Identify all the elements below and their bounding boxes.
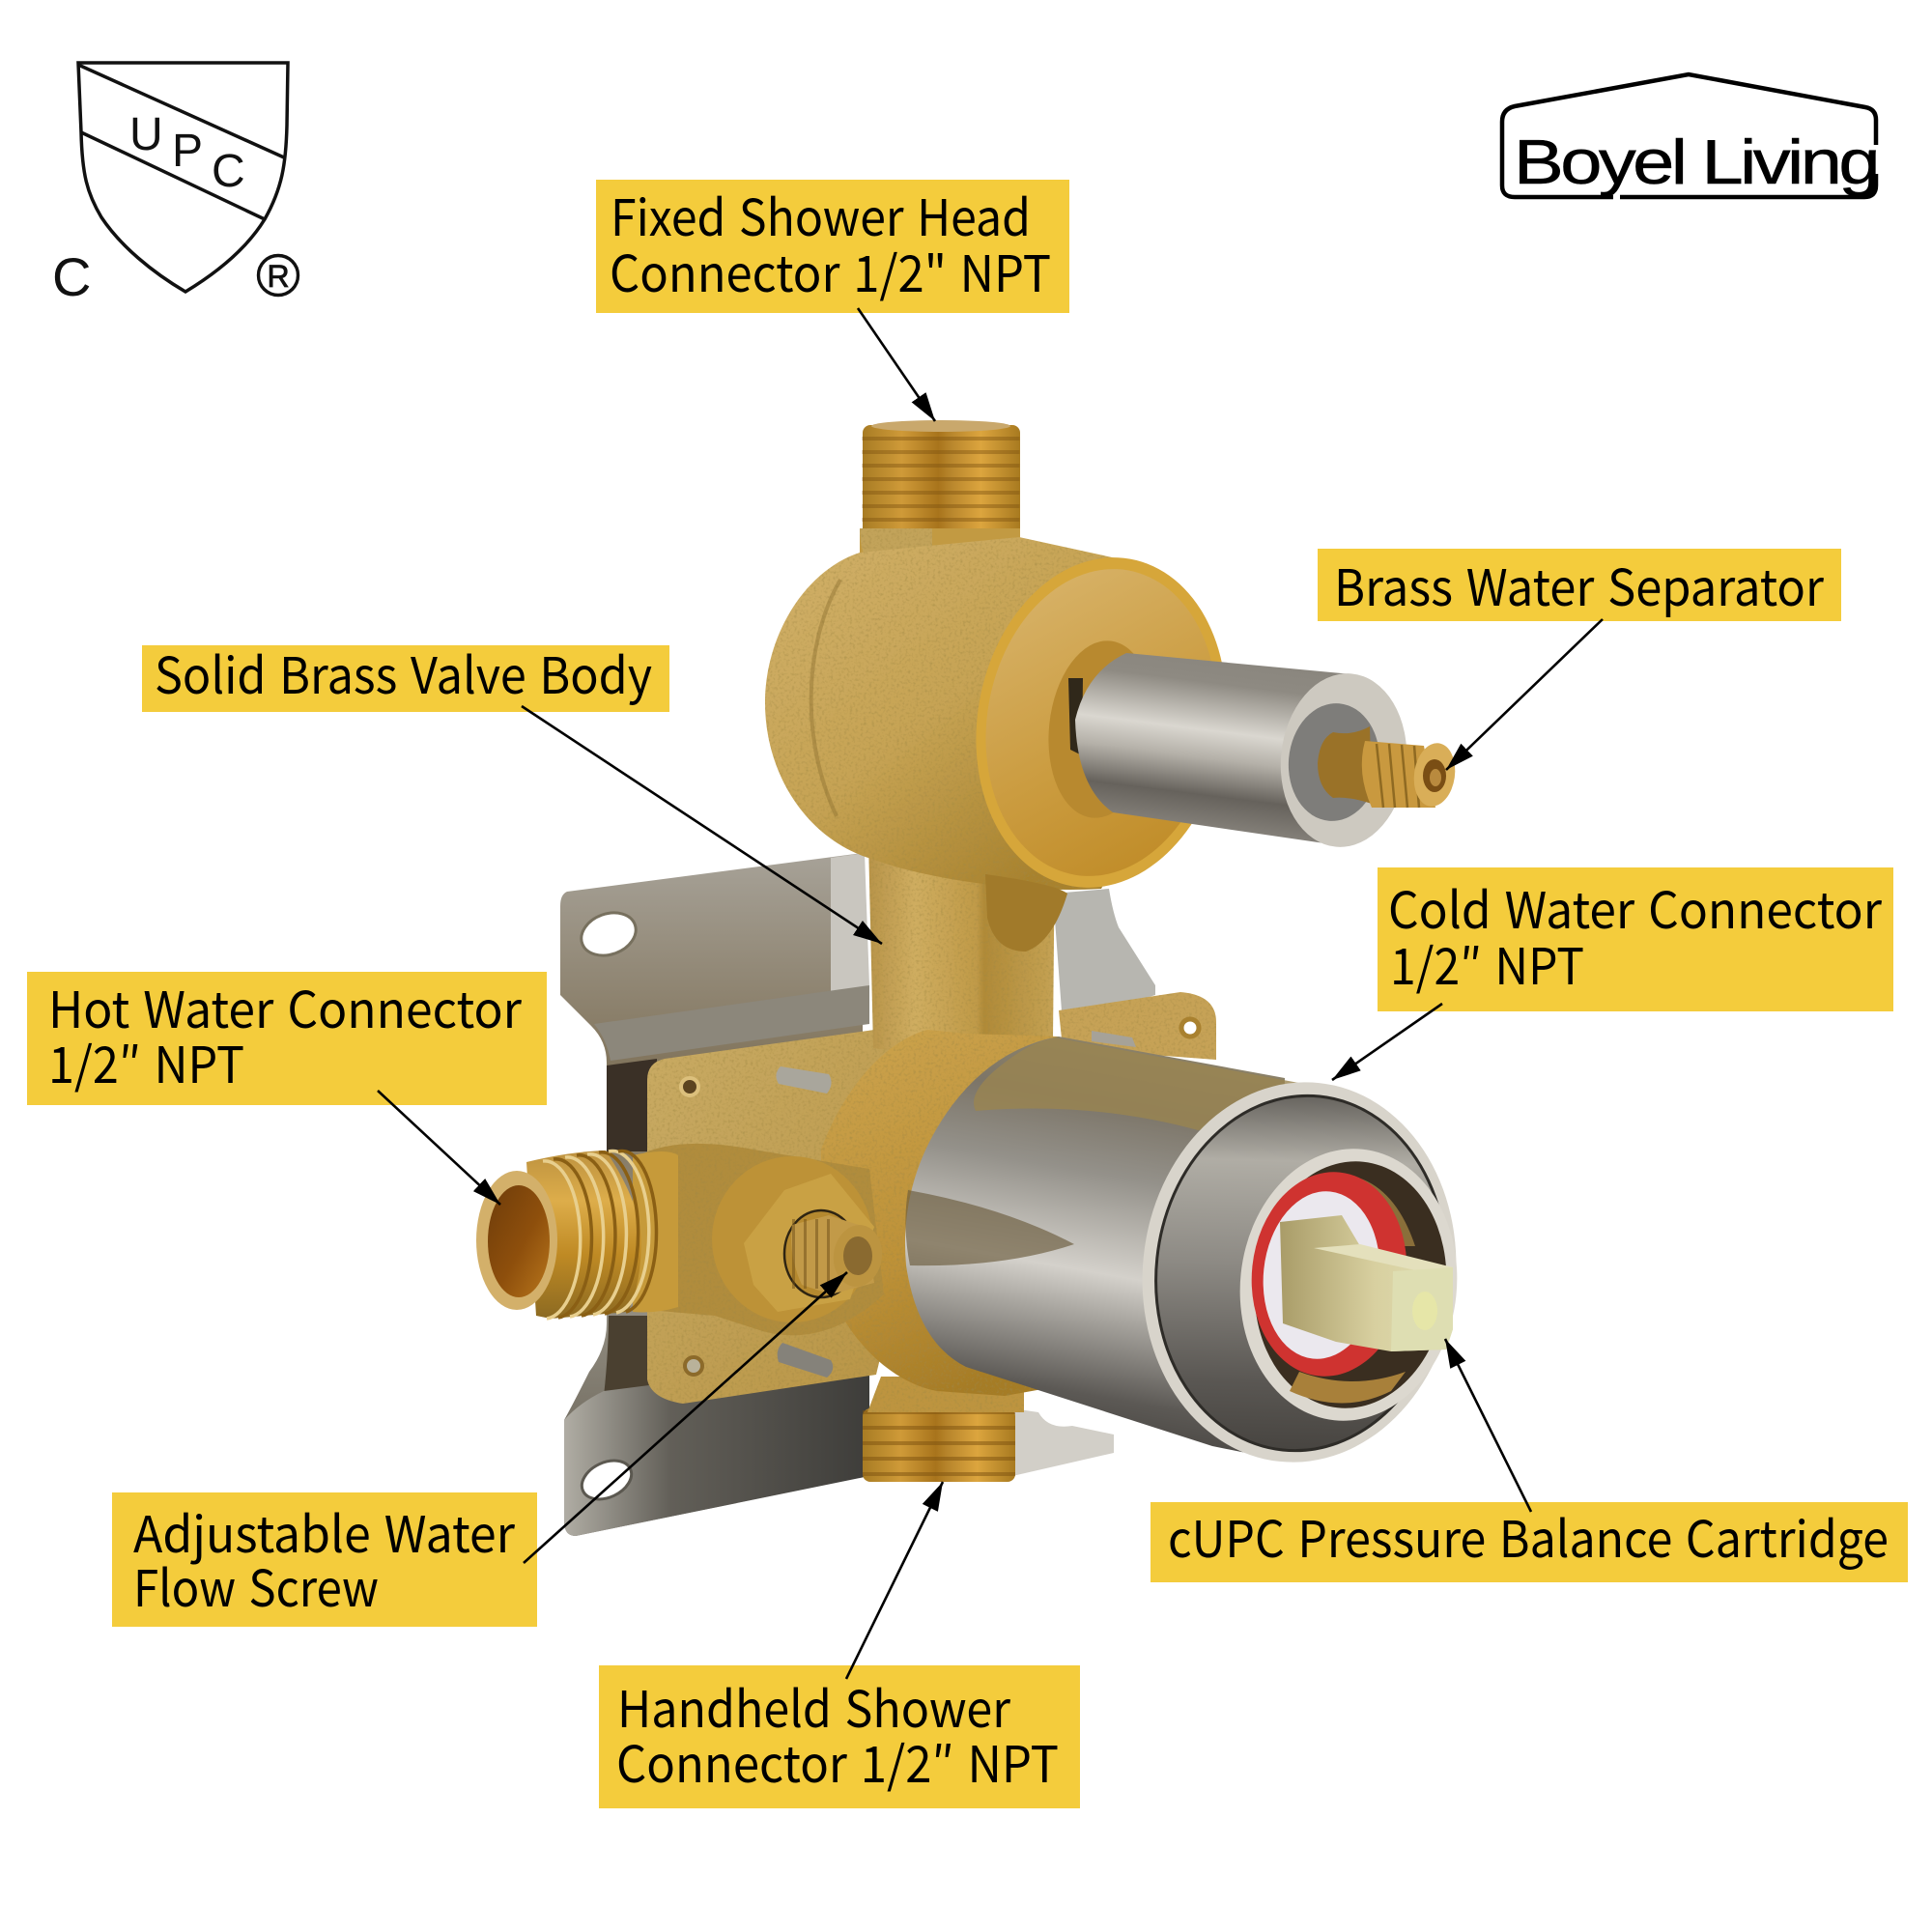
hot water threaded nipple xyxy=(476,1151,656,1319)
arrow: brass water separator xyxy=(1446,619,1603,770)
front ring xyxy=(1123,1066,1475,1478)
stem end inner xyxy=(1284,699,1384,825)
callout: handheld shower connector: Connector 1/2″ NPT xyxy=(616,1724,1059,1797)
callout: brass water separator: Brass Water Separator xyxy=(1334,548,1825,620)
plate bright edge near neck xyxy=(831,853,869,995)
sleeve lower reflection xyxy=(905,1190,1074,1265)
plate fold band xyxy=(594,985,869,1061)
neck xyxy=(868,840,1055,1053)
UPC letters: P xyxy=(172,126,203,177)
sleeve brass reflection xyxy=(974,1037,1304,1130)
house outline xyxy=(1502,74,1876,197)
callout: cUPC pressure balance cartridge: cUPC Pressure Balance Cartridge xyxy=(1168,1499,1889,1572)
arrow: fixed shower head xyxy=(858,308,935,421)
hot water connector body xyxy=(633,1144,886,1335)
arrow: cartridge xyxy=(1445,1339,1531,1512)
shield outline xyxy=(78,63,288,292)
pin upper xyxy=(776,1066,832,1094)
inner cavity xyxy=(1242,1151,1459,1418)
registered mark: R xyxy=(267,259,290,294)
plate screw holes xyxy=(681,1078,698,1095)
arrow: solid brass valve body xyxy=(522,706,882,944)
arrow: adjustable water flow screw xyxy=(524,1272,847,1563)
callout: cold water connector xyxy=(1378,867,1893,1011)
callout: fixed shower head connector xyxy=(596,178,1069,313)
connector neck xyxy=(633,1151,678,1312)
callout: handheld shower connector xyxy=(599,1665,1080,1808)
top connector xyxy=(860,420,1020,565)
neck side lump xyxy=(985,874,1067,952)
brass plate xyxy=(647,1027,927,1404)
inner lip xyxy=(1227,1138,1470,1432)
plate right lower xyxy=(1012,1408,1114,1476)
main valve sleeve xyxy=(905,1037,1285,1459)
callout: cold water connector: Cold Water Connector xyxy=(1388,870,1883,943)
brass spline xyxy=(1318,726,1459,810)
UPC letters: C xyxy=(212,146,245,197)
bottom connector threads xyxy=(863,1377,1024,1482)
dark gap lower xyxy=(604,1316,657,1396)
white core xyxy=(1255,1185,1388,1365)
adjustment screw xyxy=(791,1215,874,1294)
callout: fixed shower head connector: Fixed Shower Head xyxy=(611,178,1031,250)
mounting slot lower xyxy=(576,1453,638,1507)
pin rear xyxy=(1092,1031,1136,1047)
callout: adjustable water flow screw: Flow Screw xyxy=(133,1548,379,1621)
rim xyxy=(476,1171,557,1310)
arrow: hot water connector xyxy=(378,1091,500,1205)
callout: adjustable water flow screw: Adjustable Water xyxy=(133,1494,516,1567)
plate right upper xyxy=(1053,889,1155,1024)
plate lower section xyxy=(564,1357,869,1536)
callout: adjustable water flow screw xyxy=(112,1492,537,1627)
callout: cold water connector: 1/2″ NPT xyxy=(1390,926,1584,999)
front cup xyxy=(1139,1081,1463,1465)
callout: handheld shower connector: Handheld Shower xyxy=(617,1669,1011,1742)
brass liner xyxy=(1290,1372,1406,1403)
cartridge stem xyxy=(1280,1215,1453,1351)
UPC letters: U xyxy=(129,109,163,160)
flange xyxy=(712,1156,872,1322)
callout: solid brass valve body: Solid Brass Valve Body xyxy=(155,636,652,708)
bore xyxy=(488,1185,550,1297)
pin lower xyxy=(778,1343,833,1378)
registered mark xyxy=(259,255,298,296)
brand name: Boyel Living xyxy=(1514,127,1877,197)
dark gap upper xyxy=(607,1059,657,1151)
upper flange xyxy=(951,537,1252,908)
callout: fixed shower head connector: Connector 1/2" NPT xyxy=(610,234,1051,306)
logo: Boyel Living xyxy=(1502,74,1877,197)
UPC letters xyxy=(129,109,245,197)
arrow: cold water connector xyxy=(1332,1004,1442,1080)
thread turns xyxy=(543,1151,656,1319)
product photo: valve xyxy=(476,420,1475,1536)
brass plate right xyxy=(1059,992,1216,1060)
callout: hot water connector: 1/2″ NPT xyxy=(48,1025,244,1097)
o-ring xyxy=(784,1210,858,1297)
C letter: C xyxy=(52,246,91,307)
stem cylinder xyxy=(1075,653,1351,845)
callout: hot water connector: Hot Water Connector xyxy=(48,970,523,1042)
upper body casting xyxy=(765,537,1217,890)
casting seam xyxy=(811,580,840,816)
stem end ring xyxy=(1273,668,1414,852)
mounting slot upper xyxy=(576,905,641,963)
arrow: handheld shower connector xyxy=(846,1482,943,1679)
hex nut xyxy=(744,1174,874,1312)
logo: cUPC certification mark xyxy=(52,63,298,307)
red seal xyxy=(1241,1164,1417,1384)
connector collar xyxy=(638,1144,884,1335)
callout: hot water connector xyxy=(27,970,547,1105)
mounting plate upper xyxy=(560,853,863,1536)
lower body casting xyxy=(821,1030,1140,1396)
